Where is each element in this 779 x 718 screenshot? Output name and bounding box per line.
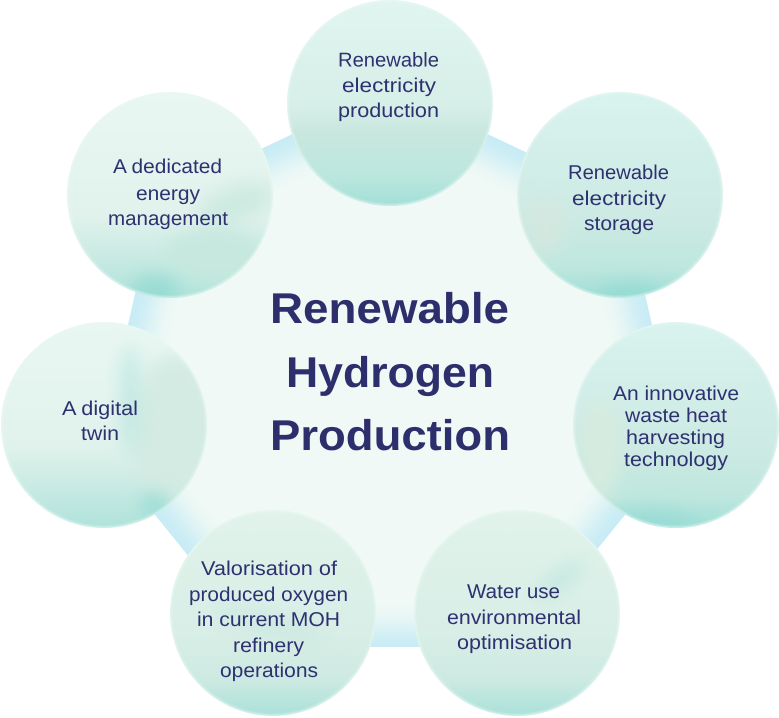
label: production (338, 100, 439, 122)
label: refinery (233, 635, 304, 657)
circle: water use environmental optimisation (414, 510, 620, 716)
label: electricity (342, 75, 436, 97)
label: electricity (572, 188, 666, 210)
label (338, 50, 439, 122)
title: Renewable (270, 285, 509, 333)
circle: renewable electricity storage (517, 92, 723, 312)
title (270, 285, 510, 460)
circle: renewable electricity production (287, 0, 493, 206)
label: Renewable (568, 162, 669, 184)
label: Valorisation of (201, 558, 337, 580)
label (189, 558, 348, 682)
label: produced oxygen (189, 584, 348, 606)
label: harvesting (626, 427, 725, 449)
label: twin (81, 423, 119, 445)
label (613, 383, 739, 471)
circle: digital twin (1, 322, 220, 528)
label: A digital (62, 398, 138, 420)
title: Hydrogen (286, 349, 494, 397)
circle: dedicated energy management (67, 92, 279, 308)
label: energy (136, 183, 200, 205)
label: technology (624, 449, 728, 471)
label: management (108, 208, 228, 230)
label: An innovative (613, 383, 739, 405)
label (568, 162, 669, 235)
central heptagon panel (128, 134, 652, 647)
label: environmental (447, 607, 581, 629)
label (447, 581, 581, 654)
label: A dedicated (113, 156, 222, 178)
label: optimisation (457, 632, 572, 654)
circle: innovative waste heat harvesting technology (573, 322, 779, 539)
circle: valorisation of produced oxygen (170, 510, 376, 716)
label: in current MOH (197, 609, 340, 631)
label: operations (220, 660, 318, 682)
label: Water use (467, 581, 560, 603)
label: waste heat (624, 405, 727, 427)
title: Production (270, 412, 510, 460)
label: Renewable (338, 50, 439, 72)
label: storage (584, 213, 654, 235)
label (62, 398, 138, 445)
label (108, 156, 228, 230)
